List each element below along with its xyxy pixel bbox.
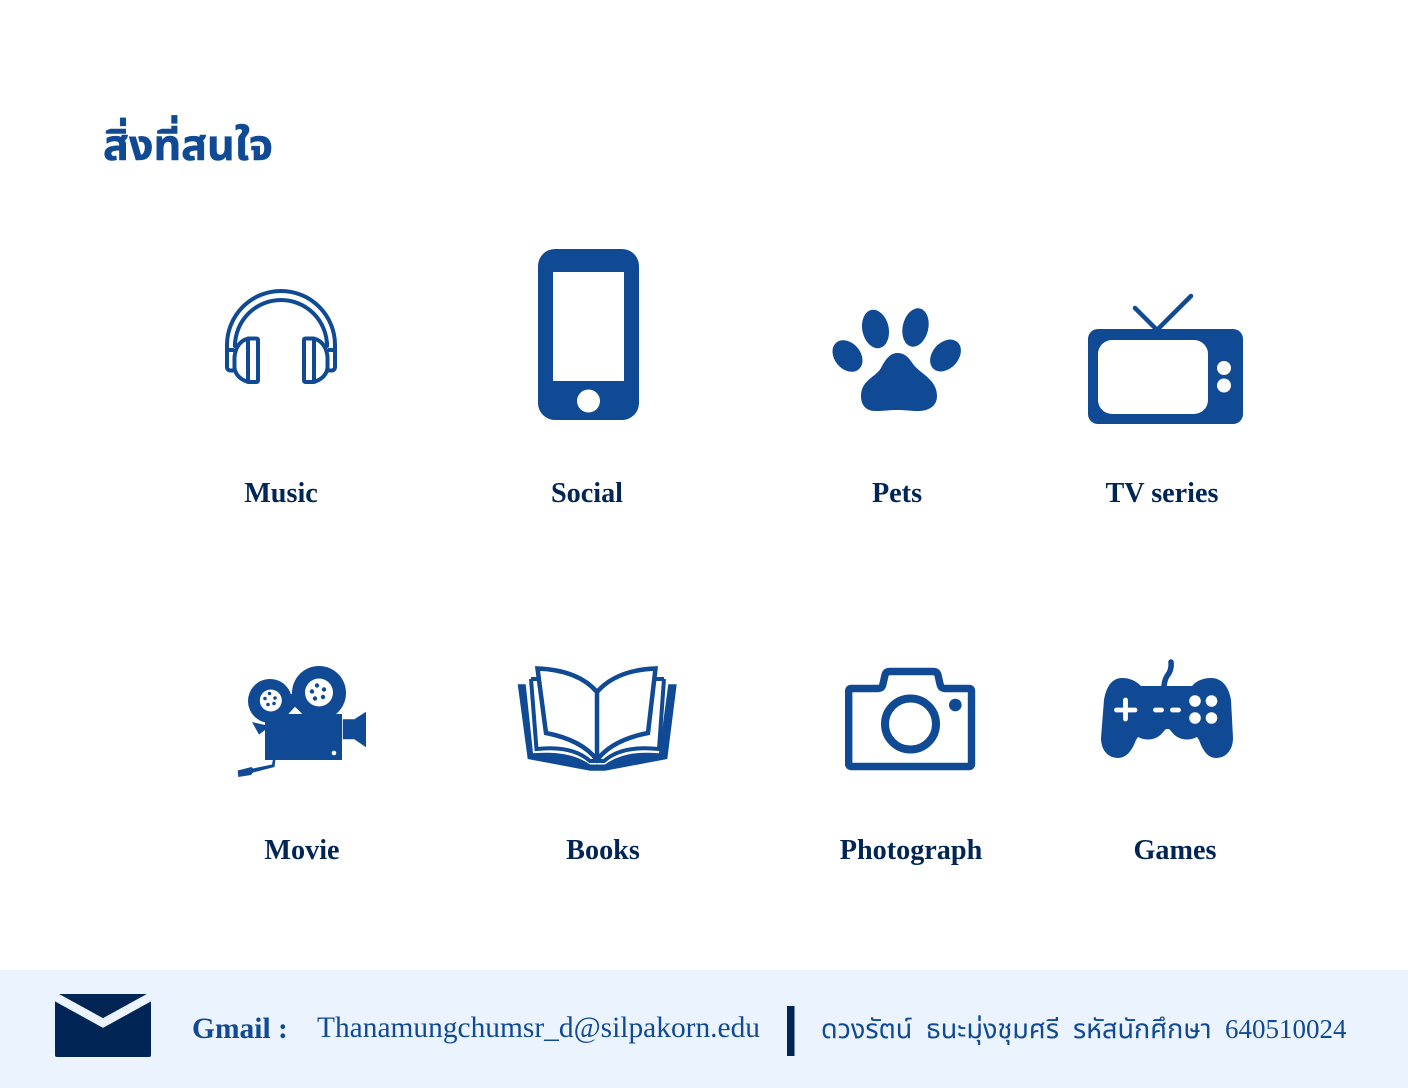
icon: game controller xyxy=(1101,662,1233,758)
student name: ดวงรัตน์ xyxy=(821,1014,912,1044)
label: Games: Games xyxy=(1134,835,1217,866)
icon: movie camera xyxy=(238,666,366,777)
label: Music: Music xyxy=(244,478,318,509)
label: Pets: Pets xyxy=(872,478,922,509)
icon: photo camera xyxy=(849,672,972,766)
icon: envelope xyxy=(50,994,156,1057)
icon: television xyxy=(1088,296,1243,424)
title: สิ่งที่สนใจ xyxy=(103,115,273,170)
student id label: รหัสนักศึกษา xyxy=(1073,1014,1212,1044)
student id number: 640510024 xyxy=(1225,1014,1347,1044)
icon: headphones xyxy=(227,291,335,382)
icon: open book xyxy=(518,668,677,771)
gmail label: Gmail : xyxy=(192,1013,288,1045)
icon: smartphone xyxy=(538,249,639,420)
label: Movie: Movie xyxy=(264,835,340,866)
label: Books: Books xyxy=(566,835,640,866)
student surname: ธนะมุ่งชุมศรี xyxy=(926,1014,1059,1045)
email address: Thanamungchumsr_d@silpakorn.edu xyxy=(317,1011,760,1044)
label: Photograph: Photograph xyxy=(840,835,983,866)
icon: paw xyxy=(826,306,967,411)
footer divider xyxy=(787,1006,794,1056)
footer band xyxy=(0,970,1408,1088)
label: TV series: TV series xyxy=(1106,478,1219,509)
label: Social: Social xyxy=(551,478,623,509)
